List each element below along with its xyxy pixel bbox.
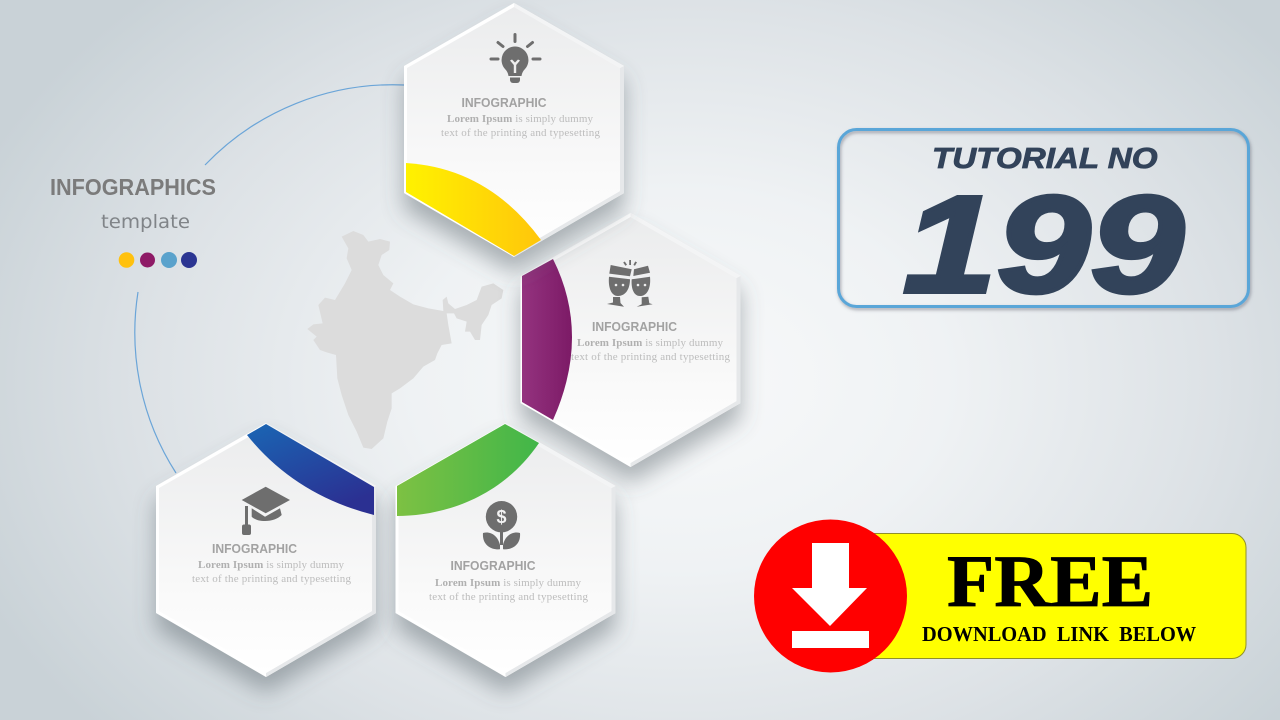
body text: Lorem Ipsum is simply dummy — [447, 113, 594, 125]
download link label: DOWNLOAD LINK BELOW — [922, 624, 1197, 646]
icon: cheers glasses — [607, 260, 653, 307]
body text — [429, 577, 588, 603]
label: tutorial no: TUTORIAL NO — [932, 142, 1158, 175]
body text: text of the printing and typesetting — [192, 573, 352, 585]
icon: money plant — [483, 501, 520, 549]
body text: Lorem Ipsum is simply dummy — [198, 559, 344, 571]
panel: blue hexagon — [156, 423, 376, 677]
subtitle: template — [101, 211, 190, 233]
yellow arc accent — [406, 163, 541, 256]
panel: green hexagon — [396, 423, 616, 677]
icon: download button — [754, 520, 907, 672]
heading: INFOGRAPHIC — [212, 541, 298, 556]
icon: graduation cap — [242, 487, 290, 535]
map of India — [307, 231, 503, 449]
body text — [192, 559, 352, 585]
heading: INFOGRAPHIC — [462, 95, 547, 110]
body text: Lorem Ipsum is simply dummy — [435, 577, 582, 589]
icon: money plant: $ — [496, 507, 507, 527]
purple arc accent — [522, 259, 572, 420]
body text: text of the printing and typesetting — [571, 351, 730, 363]
arc: upper connector line — [205, 85, 404, 165]
body text: text of the printing and typesetting — [441, 127, 600, 139]
free label: FREE — [947, 541, 1153, 623]
heading: INFOGRAPHIC — [592, 319, 678, 334]
legend dots — [119, 252, 197, 268]
green arc accent — [397, 424, 539, 516]
icon: light bulb — [491, 34, 540, 83]
heading: INFOGRAPHIC — [450, 558, 536, 573]
panel: tutorial number — [838, 130, 1248, 322]
panel: yellow hexagon — [404, 3, 624, 257]
blue arc accent — [247, 424, 374, 515]
body text: Lorem Ipsum is simply dummy — [577, 337, 724, 349]
body text — [571, 337, 730, 363]
body text — [441, 113, 600, 139]
title: INFOGRAPHICS — [50, 174, 216, 200]
panel: purple hexagon — [520, 213, 740, 467]
arc: lower connector line — [135, 292, 176, 473]
number 199: 199 — [903, 167, 1184, 322]
panel: free download badge — [754, 520, 1246, 672]
title block — [50, 174, 216, 268]
body text: text of the printing and typesetting — [429, 591, 588, 603]
